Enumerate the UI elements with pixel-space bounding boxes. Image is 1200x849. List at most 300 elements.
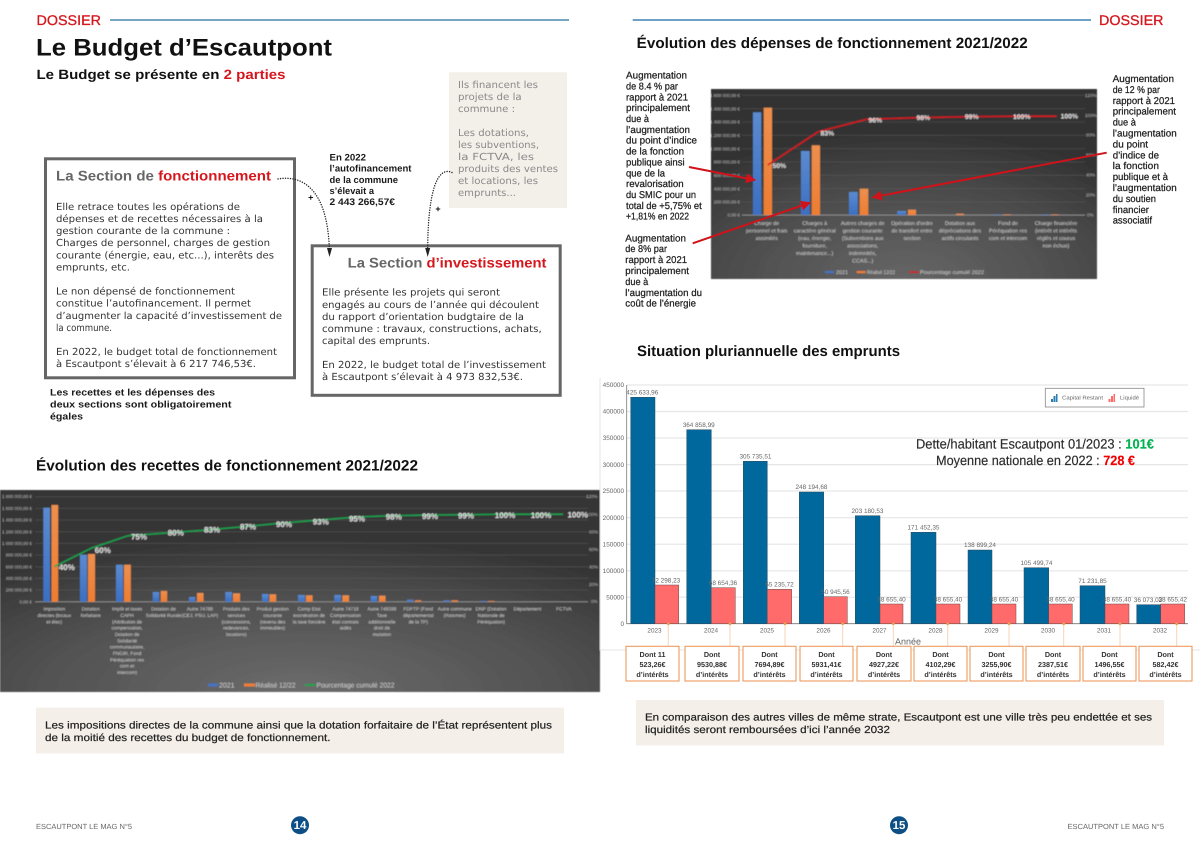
chart: recettes de fonctionnement: FDPTP (Fond [404, 607, 433, 613]
chart: dépenses de fonctionnement: Fond de [998, 221, 1018, 227]
chart: dépenses de fonctionnement: 1 200 000,00 € [710, 133, 740, 138]
chart: recettes de fonctionnement: 1 200 000,00 € [2, 529, 32, 534]
page 15 header: DOSSIER: DOSSIER [1099, 12, 1164, 28]
panel: section de fonctionnement: En 2022, le budget total de fonctionnement [56, 347, 277, 358]
chart: emprunts pluriannuels: d’intérêts [868, 670, 900, 679]
arrow: fonctionnement to investissement [278, 178, 332, 257]
chart: recettes de fonctionnement: 0,00 € [19, 599, 32, 604]
chart: emprunts pluriannuels: 248 194,68 [796, 484, 828, 491]
chart: emprunts pluriannuels: 2031 [1097, 628, 1112, 634]
chart: emprunts pluriannuels: 72 298,23 [652, 578, 681, 584]
annotation: charges générales: de 8% par [625, 244, 668, 255]
chart: dépenses de fonctionnement: CCAS...) [852, 258, 874, 264]
chart: emprunts pluriannuels: Dont [818, 650, 835, 659]
chart: emprunts pluriannuels: 2025 [760, 628, 775, 634]
panel: recettes d'investissement: emprunts... [458, 188, 516, 199]
callout: impositions directes [36, 708, 564, 754]
chart: recettes de fonctionnement: 600 000,00 € [6, 564, 32, 569]
chart: recettes de fonctionnement: 100% [531, 511, 551, 520]
chart: recettes de fonctionnement: Pourcentage cumulé 2022 [316, 682, 395, 690]
annotation: autres charges: due à [1113, 118, 1137, 129]
chart: recettes de fonctionnement: 87% [240, 523, 256, 532]
chart: emprunts pluriannuels: 50000 [606, 594, 624, 601]
chart: recettes de fonctionnement: immeubles) [260, 626, 285, 632]
chart: recettes de fonctionnement: 99% [422, 512, 438, 521]
chart: recettes de fonctionnement: aidés [340, 626, 352, 632]
chart: emprunts pluriannuels: Dont [1045, 650, 1062, 659]
chart: recettes de fonctionnement: (Raismes) [444, 613, 466, 619]
chart: dépenses de fonctionnement: assimilés [756, 236, 778, 242]
chart: dépenses de fonctionnement: 0% [1087, 213, 1094, 218]
chart: emprunts pluriannuels: Année [895, 636, 921, 646]
note: recettes et dépenses égales: deux sections sont obligatoirement [50, 400, 232, 411]
annotation: autres charges: rapport à 2021 [1113, 96, 1175, 107]
chart: emprunts pluriannuels: Dont [876, 650, 893, 659]
panel: recettes d'investissement [449, 72, 567, 208]
annotation: charges générales: l’augmentation du [625, 288, 702, 299]
chart: dépenses de fonctionnement: caractère général [794, 228, 836, 234]
chart: recettes de fonctionnement: mutation [373, 632, 391, 638]
chart: emprunts pluriannuels: 3255,90€ [982, 660, 1011, 669]
chart: recettes de fonctionnement: Autre 74788 [187, 607, 213, 613]
chart: recettes de fonctionnement: de la TP) [409, 619, 428, 625]
chart: emprunts pluriannuels: 68 654,36 [709, 580, 738, 587]
chart: dépenses de fonctionnement: Pourcentage cumulé 2022 [920, 270, 984, 276]
chart: emprunts pluriannuels: 38 655,40 [934, 596, 963, 604]
panel: recettes d'investissement: Ils financent les [458, 80, 538, 91]
chart: dépenses de fonctionnement: maintenance...) [796, 251, 833, 257]
panel: section d'investissement [312, 246, 560, 395]
chart: emprunts pluriannuels [600, 378, 1200, 681]
chart: recettes de fonctionnement: 1 400 000,00 € [2, 518, 32, 523]
autofinancement text: l’autofinancement [330, 164, 412, 175]
chart: recettes de fonctionnement: Département [514, 607, 542, 613]
chart: recettes de fonctionnement: 20% [589, 582, 598, 587]
annotation: charge de personnel: de 8.4 % par [626, 82, 679, 92]
heading: évolution des recettes: Évolution des recettes de fonctionnement 2021/2022 [36, 456, 418, 474]
chart: recettes de fonctionnement: 80% [589, 530, 598, 534]
chart: dépenses de fonctionnement: Charge financière [1035, 221, 1077, 227]
chart: recettes de fonctionnement: 80% [168, 529, 184, 538]
chart: recettes de fonctionnement: (concessions, [222, 619, 251, 625]
chart: dépenses de fonctionnement: 100% [1085, 113, 1097, 118]
chart: recettes de fonctionnement: Impôt et taxes [112, 607, 143, 613]
chart: emprunts pluriannuels: 200000 [603, 515, 624, 522]
chart: recettes de fonctionnement: Solidarité Rurale [146, 613, 182, 619]
annotation: charge de personnel: de la fonction [626, 147, 684, 158]
chart: dépenses de fonctionnement: Autres charges de [841, 221, 885, 227]
chart: dépenses de fonctionnement: 98% [916, 115, 930, 122]
chart: emprunts pluriannuels: Dont [1157, 650, 1174, 659]
chart: dépenses de fonctionnement: Péréquation res [989, 228, 1027, 234]
chart: emprunts pluriannuels: d’intérêts [1093, 670, 1126, 679]
chart: recettes de fonctionnement: redevances, [223, 626, 249, 632]
chart: emprunts pluriannuels: 305 735,51 [740, 454, 772, 460]
chart: dépenses de fonctionnement: 60% [1086, 153, 1095, 158]
chart: emprunts pluriannuels: 425 633,96 [626, 390, 659, 396]
chart: recettes de fonctionnement: intercom) [117, 670, 137, 676]
chart: emprunts pluriannuels: 0 [620, 621, 624, 628]
chart: emprunts pluriannuels: 1496,55€ [1095, 660, 1124, 669]
chart: emprunts pluriannuels: Dont [1101, 650, 1118, 659]
chart: dépenses de fonctionnement: (eau, énergie, [798, 236, 832, 242]
callout: impositions directes: de la moitié des recettes du budget de fonctionnement. [45, 733, 330, 744]
chart: emprunts pluriannuels: d’intérêts [810, 670, 843, 679]
panel: section d'investissement: engagés au cours de l’année qui découlent [322, 300, 539, 311]
footer page 15: ESCAUTPONT LE MAG N°5 [1068, 822, 1164, 831]
annotation: autres charges: publique et à [1113, 172, 1169, 183]
autofinancement text: s’élevait a [330, 186, 375, 197]
annotation: charges générales [625, 233, 702, 310]
chart: dépenses de fonctionnement: 600 000,00 € [714, 173, 740, 178]
callout: comparaison: En comparaison des autres villes de même strate, Escautpont est une ville très peu endettée et ses [645, 712, 1152, 724]
chart: emprunts pluriannuels: d’intérêts [980, 670, 1013, 679]
chart: recettes de fonctionnement [0, 490, 600, 692]
chart: emprunts pluriannuels: d’intérêts [696, 670, 728, 679]
chart: emprunts pluriannuels: 2030 [1041, 628, 1056, 634]
chart: recettes de fonctionnement: compensation, [111, 626, 143, 632]
chart: dépenses de fonctionnement: 40% [1086, 173, 1095, 178]
chart: emprunts pluriannuels: 38 655,42 [1158, 596, 1187, 604]
annotation: charge de personnel: +1,81% en 2022 [626, 212, 689, 223]
chart: dépenses de fonctionnement: 200 000,00 € [714, 200, 740, 205]
arrow: recettes to investissement: + [435, 204, 441, 214]
chart: recettes de fonctionnement: 120% [586, 494, 598, 499]
chart: dépenses de fonctionnement: 100% [1061, 114, 1078, 120]
chart: recettes de fonctionnement: Imposition [43, 607, 66, 613]
title: Le Budget d’Escautpont [36, 34, 332, 62]
chart: recettes de fonctionnement: départemental [403, 613, 434, 619]
chart: dépenses de fonctionnement: 50% [772, 163, 786, 170]
chart: emprunts pluriannuels: d’intérêts [1149, 670, 1182, 679]
chart: dépenses de fonctionnement: Opération d'ordre [891, 221, 933, 227]
chart: recettes de fonctionnement: 90% [276, 520, 292, 529]
panel: section d'investissement: En 2022, le budget total de l’investissement [322, 360, 546, 371]
chart: recettes de fonctionnement: FNGIR, Fond [113, 651, 142, 657]
autofinancement text: de la commune [330, 175, 398, 186]
callout: impositions directes: Les impositions directes de la commune ainsi que la dotation forfaitaire de l’État représentent plus [45, 720, 552, 732]
chart: recettes de fonctionnement: et élec) [46, 619, 63, 625]
chart: recettes de fonctionnement: exonération de [293, 613, 325, 619]
chart: dépenses de fonctionnement: 800 000,00 € [714, 160, 740, 165]
annotation: charge de personnel: Augmentation [626, 71, 687, 82]
arrow: recettes to investissement [425, 171, 452, 257]
chart: recettes de fonctionnement: 1 600 000,00 € [2, 506, 32, 511]
panel: section de fonctionnement [46, 159, 294, 378]
chart: emprunts pluriannuels: 250000 [603, 488, 624, 495]
chart: recettes de fonctionnement: 100% [586, 512, 598, 517]
chart: recettes de fonctionnement: Solidarité [117, 638, 137, 644]
panel: section de fonctionnement: constitue l’autofinancement. Il permet [56, 299, 251, 310]
chart: emprunts pluriannuels: 9530,88€ [697, 660, 727, 669]
chart: emprunts pluriannuels: 2032 [1153, 628, 1168, 634]
chart: dépenses de fonctionnement: Charges à [802, 221, 827, 227]
annotation: charge de personnel: due à [626, 114, 650, 125]
panel: section d'investissement: La Section d’investissement [348, 254, 547, 270]
panel: section d'investissement: Elle présente les projets qui seront [322, 288, 500, 299]
chart: emprunts pluriannuels: Dont [932, 650, 949, 659]
chart: emprunts pluriannuels: 400000 [603, 409, 624, 416]
chart: dépenses de fonctionnement: personnel et frais [746, 228, 788, 234]
chart: recettes de fonctionnement: forfaitaire [81, 613, 101, 619]
chart: dépenses de fonctionnement: actifs circulants [942, 236, 979, 242]
chart: recettes de fonctionnement: 83% [204, 526, 220, 535]
chart: dépenses de fonctionnement: 20% [1086, 193, 1095, 198]
chart: emprunts pluriannuels: Dont 11 [640, 650, 665, 659]
panel: section de fonctionnement: courante (énergie, eau, etc...), interêts des [56, 250, 274, 261]
chart: recettes de fonctionnement: Péréquation res [110, 657, 145, 663]
panel: section d'investissement: commune : travaux, constructions, achats, [322, 324, 542, 335]
chart: emprunts pluriannuels: 7694,89€ [755, 660, 784, 669]
chart: recettes de fonctionnement: com et [120, 664, 135, 670]
chart: emprunts pluriannuels: 203 180,53 [852, 508, 884, 515]
chart: emprunts pluriannuels: Dont [761, 650, 778, 659]
chart: emprunts pluriannuels: 2387,51€ [1038, 660, 1068, 669]
annotation: charges générales: due à [625, 277, 649, 288]
chart: recettes de fonctionnement: Péréquation) [477, 619, 505, 625]
annotation: charges générales: Augmentation [625, 233, 686, 244]
annotation: autres charges: la fonction [1113, 161, 1159, 172]
heading: situation des emprunts: Situation pluriannuelle des emprunts [637, 343, 900, 360]
chart: recettes de fonctionnement: Dotation de [115, 632, 140, 638]
chart: dépenses de fonctionnement: associations, [847, 244, 879, 250]
panel: section de fonctionnement: la commune. [56, 323, 112, 334]
panel: recettes d'investissement: produits des ventes [458, 164, 558, 175]
chart: recettes de fonctionnement: 99% [458, 511, 474, 520]
debt per inhabitant text [916, 436, 1154, 468]
chart: recettes de fonctionnement: 95% [349, 515, 365, 524]
annotation: autres charges: financier [1113, 205, 1150, 216]
panel: recettes d'investissement: et locations, les [458, 176, 538, 187]
chart: recettes de fonctionnement: FCTVA [556, 607, 572, 613]
chart: emprunts pluriannuels: 100000 [603, 568, 624, 575]
chart: dépenses de fonctionnement: (intérêt et intérêts [1035, 228, 1077, 234]
panel: section de fonctionnement: Elle retrace toutes les opérations de [56, 202, 240, 213]
panel: section d'investissement: du rapport d’orientation budgtaire de la [322, 312, 524, 323]
arrow: charge de personnel [689, 167, 755, 180]
chart: dépenses de fonctionnement: dépréciations des [939, 228, 981, 234]
chart: recettes de fonctionnement: 93% [313, 517, 329, 526]
autofinancement text: En 2022 [330, 153, 366, 164]
chart: emprunts pluriannuels: 2023 [647, 628, 662, 634]
chart: dépenses de fonctionnement: réglés et courus [1037, 236, 1075, 242]
chart: recettes de fonctionnement: services [228, 613, 246, 619]
chart: emprunts pluriannuels: 38 655,40 [877, 596, 906, 604]
chart: recettes de fonctionnement: locations) [226, 632, 247, 638]
debt per inhabitant text: Moyenne nationale en 2022 : 728 € [936, 453, 1135, 468]
chart: dépenses de fonctionnement: section [903, 236, 921, 242]
annotation: autres charges: principalement [1113, 107, 1176, 118]
panel: section de fonctionnement: La Section de fonctionnement [56, 168, 271, 184]
note: recettes et dépenses égales [50, 388, 232, 423]
chart: recettes de fonctionnement: Dotation de [151, 607, 176, 613]
chart: recettes de fonctionnement: Produit gestion [257, 607, 289, 613]
chart: emprunts pluriannuels: 364 858,99 [683, 422, 715, 429]
chart: emprunts pluriannuels: Dont [704, 650, 721, 659]
chart: dépenses de fonctionnement: Dotation aux [945, 221, 975, 227]
arrow: charges à caractère général [693, 203, 810, 243]
chart: emprunts pluriannuels: 71 231,85 [1078, 578, 1107, 585]
chart: recettes de fonctionnement: Nationale de [478, 613, 505, 619]
chart: emprunts pluriannuels: 2024 [704, 628, 719, 634]
chart: recettes de fonctionnement: 100% [567, 511, 588, 520]
chart legend: Capital Restant [1062, 396, 1104, 402]
chart: recettes de fonctionnement: DNP (Dotation [476, 607, 507, 613]
annotation: autres charges: du point [1113, 139, 1148, 150]
chart: recettes de fonctionnement: communautaire, [110, 645, 144, 651]
panel: recettes d'investissement: projets de la [458, 92, 522, 103]
chart: recettes de fonctionnement: Taxe [377, 613, 387, 619]
chart: dépenses de fonctionnement: 400 000,00 € [714, 186, 740, 191]
chart: emprunts pluriannuels: 36 073,02 [1134, 597, 1163, 604]
chart: recettes de fonctionnement: 1 000 000,00 € [2, 541, 32, 546]
footer page 15 [890, 816, 1164, 834]
page 14 header: DOSSIER: DOSSIER [36, 12, 101, 28]
chart: recettes de fonctionnement: (CEJ, PSU, LAP) [182, 613, 219, 619]
chart: recettes de fonctionnement: Réalisé 12/22 [256, 682, 296, 690]
note: recettes et dépenses égales: égales [50, 412, 83, 423]
annotation: charge de personnel: total de +5,75% et [626, 201, 702, 212]
chart: emprunts pluriannuels: 2026 [816, 628, 831, 634]
chart: dépenses de fonctionnement: 80% [1086, 133, 1095, 138]
chart: recettes de fonctionnement: droit de [374, 626, 390, 632]
chart: recettes de fonctionnement: 200 000,00 € [6, 588, 32, 593]
chart: recettes de fonctionnement: Autre 74718 [332, 607, 359, 613]
chart: recettes de fonctionnement: Autre commune [438, 607, 472, 613]
annotation: charges générales: coût de l’énergie [625, 299, 697, 310]
chart: dépenses de fonctionnement: Réalisé 12/22 [867, 270, 895, 276]
panel: section de fonctionnement: Le non dépensé de fonctionnement [56, 286, 235, 297]
arrow: autres charges de gestion [873, 153, 1107, 197]
panel: section de fonctionnement: d’augmenter la capacité d’investissement de [56, 311, 282, 322]
chart: emprunts pluriannuels: 4927,22€ [869, 660, 899, 669]
chart: emprunts pluriannuels: 350000 [603, 435, 624, 442]
subtitle: Le Budget se présente en 2 parties [36, 67, 286, 82]
chart: emprunts pluriannuels: 38 655,40 [1046, 596, 1075, 604]
callout: comparaison [636, 700, 1164, 746]
chart: recettes de fonctionnement: 75% [131, 533, 147, 542]
chart: emprunts pluriannuels: d’intérêts [924, 670, 957, 679]
footer page 14 [36, 816, 309, 834]
chart: dépenses de fonctionnement: gestion courante [843, 228, 883, 234]
chart: recettes de fonctionnement: courante [263, 613, 282, 619]
footer page 15: 15 [893, 820, 906, 832]
panel: section d'investissement: à Escautpont s’élevait à 4 973 832,53€. [322, 372, 523, 383]
chart: emprunts pluriannuels: 50 945,56 [821, 589, 850, 596]
chart: emprunts pluriannuels: 523,26€ [640, 660, 665, 669]
annotation: charge de personnel: principalement [626, 103, 690, 114]
chart: recettes de fonctionnement: Comp Etat [298, 607, 321, 613]
annotation: autres charges: l’augmentation [1113, 183, 1177, 194]
chart: recettes de fonctionnement: 40% [59, 563, 75, 572]
panel: recettes d'investissement: commune : [458, 104, 515, 115]
autofinancement text: 2 443 266,57€ [330, 197, 396, 208]
chart: emprunts pluriannuels: 4102,29€ [926, 660, 955, 669]
chart: dépenses de fonctionnement: 99% [965, 114, 979, 121]
chart: emprunts pluriannuels: 2028 [928, 628, 943, 634]
chart: emprunts pluriannuels: 38 655,40 [1103, 596, 1132, 604]
callout: comparaison: liquidités seront remboursées d’ici l’année 2032 [645, 725, 890, 736]
chart: recettes de fonctionnement: 100% [495, 511, 515, 520]
chart: dépenses de fonctionnement: 100% [1013, 114, 1030, 121]
annotation: charge de personnel [626, 71, 702, 223]
note: recettes et dépenses égales: Les recettes et les dépenses des [50, 388, 215, 399]
annotation: autres charges [1113, 74, 1177, 227]
annotation: charge de personnel: rapport à 2021 [626, 92, 688, 103]
chart: emprunts pluriannuels: 171 452,35 [908, 524, 940, 532]
chart: emprunts pluriannuels: 2027 [872, 628, 887, 634]
chart: dépenses de fonctionnement: 1 400 000,00 € [710, 120, 740, 125]
arrow: fonctionnement to investissement: + [308, 192, 313, 202]
chart: dépenses de fonctionnement: 83% [820, 130, 834, 138]
chart: emprunts pluriannuels: 65 235,72 [765, 582, 794, 589]
chart: dépenses de fonctionnement: 1 000 000,00 € [710, 146, 740, 151]
annotation: autres charges: du soutien [1113, 194, 1156, 205]
chart: recettes de fonctionnement: 60% [95, 546, 111, 555]
panel: section de fonctionnement: gestion courante de la commune : [56, 226, 230, 237]
chart: emprunts pluriannuels: d’intérêts [1037, 670, 1069, 679]
annotation: charge de personnel: l’augmentation [626, 125, 690, 136]
chart: dépenses de fonctionnement: 1 600 000,00 € [710, 93, 740, 98]
chart: recettes de fonctionnement: Produits des [223, 607, 250, 613]
chart: dépenses de fonctionnement: 96% [868, 118, 882, 124]
panel: recettes d'investissement: la FCTVA, les [458, 152, 534, 163]
chart: dépenses de fonctionnement: 120% [1085, 93, 1097, 98]
chart: dépenses de fonctionnement: 2021 [836, 270, 848, 276]
chart: dépenses de fonctionnement: 0,00 € [727, 213, 740, 218]
chart: recettes de fonctionnement: 800 000,00 € [6, 553, 32, 558]
panel: section de fonctionnement: à Escautpont s’élevait à 6 217 746,53€. [56, 359, 256, 370]
annotation: autres charges: de 12 % par [1113, 85, 1161, 96]
chart: recettes de fonctionnement: Dotation [82, 607, 100, 613]
annotation: charges générales: rapport à 2021 [625, 255, 687, 266]
panel: section de fonctionnement: dépenses et de recettes nécessaires à la [56, 214, 263, 225]
autofinancement text [330, 153, 412, 208]
annotation: autres charges: d’indice de [1113, 150, 1160, 161]
panel: recettes d'investissement: les subventions, [458, 140, 539, 151]
chart: recettes de fonctionnement: 1 800 000,00 € [2, 494, 32, 499]
chart: recettes de fonctionnement: (Attribution de [112, 619, 142, 625]
annotation: autres charges: Augmentation [1113, 74, 1174, 85]
chart: recettes de fonctionnement: 98% [386, 513, 402, 522]
chart: emprunts pluriannuels: 138 899,24 [964, 542, 996, 549]
annotation: charge de personnel: du SMIC pour un [626, 190, 696, 201]
chart: dépenses de fonctionnement [710, 89, 1097, 279]
heading: évolution des dépenses: Évolution des dépenses de fonctionnement 2021/2022 [637, 34, 1028, 52]
annotation: charge de personnel: du point d’indice [626, 136, 698, 147]
chart: recettes de fonctionnement: CAPH [120, 613, 134, 619]
chart: emprunts pluriannuels: d’intérêts [636, 670, 669, 679]
annotation: charges générales: principalement [625, 266, 689, 277]
chart: emprunts pluriannuels: 450000 [603, 382, 624, 389]
chart: recettes de fonctionnement: la taxe foncière [293, 619, 326, 625]
chart: recettes de fonctionnement: additionnelle [368, 619, 396, 625]
annotation: charge de personnel: que de la [626, 168, 666, 179]
chart: recettes de fonctionnement: 0% [591, 599, 598, 604]
chart: dépenses de fonctionnement: Charge de [754, 221, 779, 227]
chart: emprunts pluriannuels: Dont [988, 650, 1005, 659]
chart: emprunts pluriannuels: d’intérêts [753, 670, 786, 679]
chart: emprunts pluriannuels: 150000 [603, 541, 624, 548]
chart: recettes de fonctionnement: 40% [589, 564, 598, 570]
chart legend: Liquidé [1120, 394, 1139, 402]
chart legend [1045, 388, 1144, 407]
footer page 14: ESCAUTPONT LE MAG N°5 [36, 822, 132, 831]
chart: recettes de fonctionnement: Autre 748388 [367, 607, 397, 613]
chart: dépenses de fonctionnement: de transfert entre [891, 228, 933, 234]
chart: recettes de fonctionnement: Compensation [330, 613, 361, 619]
chart: dépenses de fonctionnement: com et intercom [989, 236, 1028, 242]
